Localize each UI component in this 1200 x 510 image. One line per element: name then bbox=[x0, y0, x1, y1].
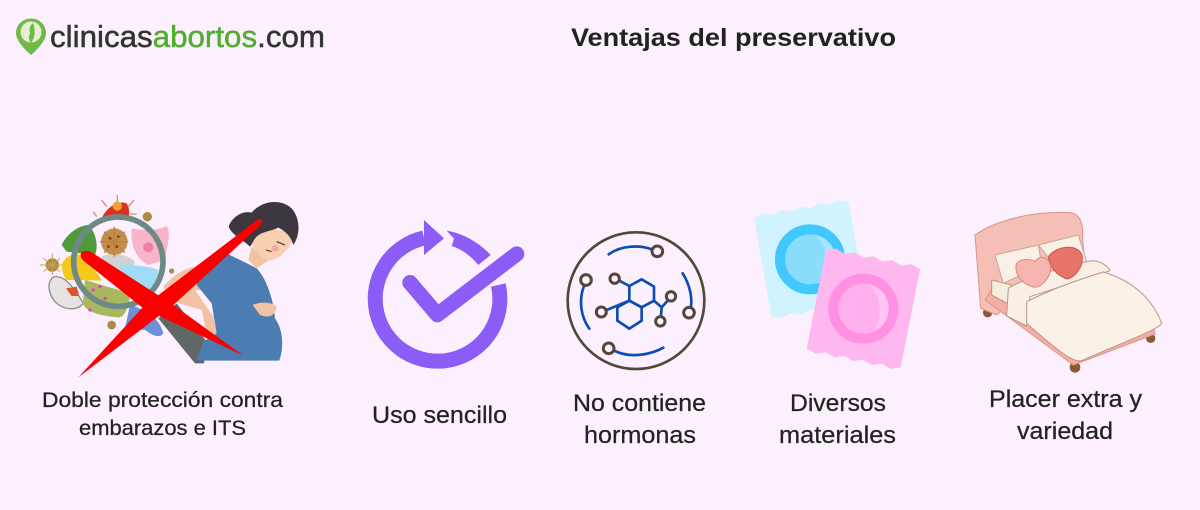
label: diversos materiales bbox=[779, 390, 896, 449]
icon: condom packets bbox=[754, 200, 920, 369]
blue packet bbox=[754, 200, 866, 318]
label: placer extra y variedad: Placer extra y bbox=[989, 386, 1142, 413]
title: Ventajas del preservativo bbox=[571, 24, 896, 52]
label: no contiene hormonas: No contiene bbox=[573, 390, 706, 417]
germs cluster bbox=[40, 195, 174, 336]
label: uso sencillo: Uso sencillo bbox=[372, 402, 507, 429]
panel: doble protección illustration bbox=[40, 195, 298, 377]
woman bbox=[158, 202, 298, 363]
label: placer extra y variedad bbox=[989, 386, 1142, 445]
logo: clinicasabortos.com: clinicasabortos.com bbox=[50, 19, 325, 54]
label: doble protección bbox=[42, 389, 283, 440]
pink packet bbox=[807, 249, 920, 369]
red cross bbox=[78, 219, 262, 377]
icon: bed with hearts bbox=[975, 212, 1162, 373]
label: doble protección: embarazos e ITS bbox=[79, 417, 246, 440]
label: diversos materiales: materiales bbox=[779, 422, 896, 449]
label: placer extra y variedad: variedad bbox=[1017, 418, 1113, 445]
label: doble protección: Doble protección contra bbox=[42, 389, 283, 412]
icon: hormone molecule bbox=[568, 232, 704, 369]
label: no contiene hormonas: hormonas bbox=[584, 422, 696, 449]
icon: check with circular arrow bbox=[375, 220, 517, 361]
label: no contiene hormonas bbox=[573, 390, 706, 449]
label: diversos materiales: Diversos bbox=[790, 390, 886, 417]
